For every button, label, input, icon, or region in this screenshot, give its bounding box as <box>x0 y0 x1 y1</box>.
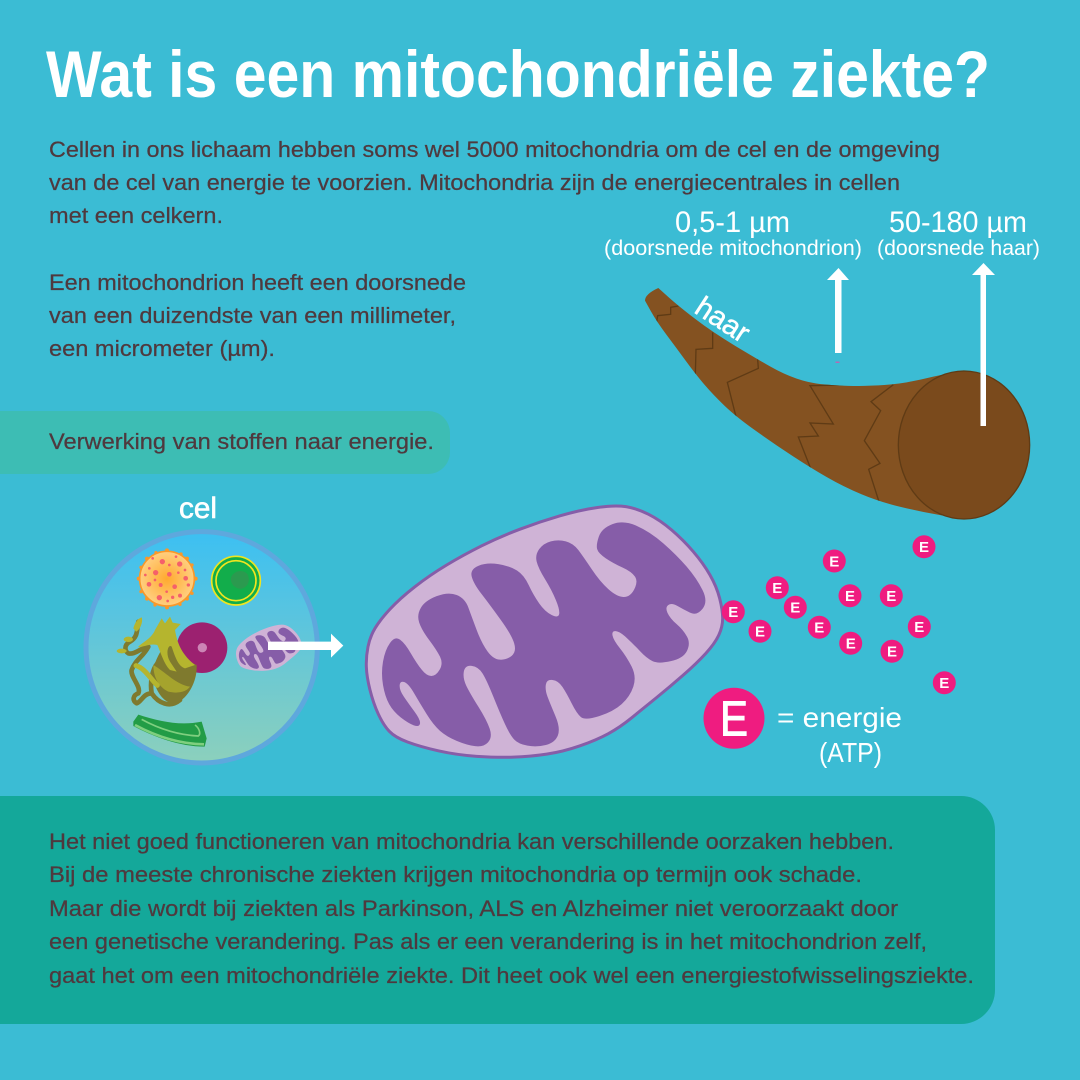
arrow: cell to mitochondrion <box>268 634 343 658</box>
label: cel: cel <box>179 492 217 525</box>
organelle: endoplasmic reticulum <box>133 715 207 747</box>
panel: causes <box>0 796 995 1024</box>
panel: causes: gaat het om een mitochondriële ziekte. Dit heet ook wel een energiestofwisselingsziekte. <box>49 963 974 988</box>
legend: energy: = energie <box>777 702 902 733</box>
label: mitochondrion size: 0,5-1 µm <box>675 206 790 239</box>
legend: energy: E <box>720 692 748 746</box>
energy particles: E <box>939 675 949 692</box>
arrow: hair size <box>972 263 995 426</box>
label: hair size: 50-180 µm <box>889 206 1027 239</box>
energy particles: E <box>829 553 839 570</box>
intro text: Cellen in ons lichaam hebben soms wel 5000 mitochondria om de cel en de omgeving <box>49 137 940 162</box>
label: mitochondrion size <box>604 206 862 260</box>
energy particles: E <box>790 600 800 617</box>
organelle: lysosome <box>137 548 198 609</box>
panel: causes: Bij de meeste chronische ziekten krijgen mitochondria op termijn ook schade. <box>49 862 862 887</box>
organelle: nucleus <box>177 622 227 673</box>
text: size of a mitochondrion: van een duizendste van een millimeter, <box>49 303 456 328</box>
organelle: golgi <box>117 617 197 704</box>
energy particles: E <box>919 539 929 556</box>
panel: causes: een genetische verandering. Pas als er een verandering is in het mitochondrion zelf, <box>49 929 927 954</box>
illustration: hair <box>645 288 1030 519</box>
legend: energy: (ATP) <box>819 737 882 768</box>
energy particles: E <box>728 604 738 621</box>
text: size of a mitochondrion <box>49 270 466 361</box>
energy particles: E <box>846 636 856 653</box>
text: size of a mitochondrion: Een mitochondrion heeft een doorsnede <box>49 270 466 295</box>
panel: processing callout <box>0 411 450 474</box>
energy particles: E <box>886 588 896 605</box>
panel: processing callout: Verwerking van stoffen naar energie. <box>49 429 434 454</box>
organelle: small mitochondrion <box>236 625 302 671</box>
legend: energy <box>704 688 902 768</box>
arrow: mitochondrion size <box>827 268 849 363</box>
intro text: met een celkern. <box>49 203 223 228</box>
energy particles <box>722 535 956 694</box>
energy particles: E <box>914 619 924 636</box>
title: Wat is een mitochondriële ziekte? <box>46 37 990 111</box>
organelle: green vesicle <box>212 556 260 605</box>
intro text <box>49 137 940 228</box>
label: hair size <box>877 206 1040 260</box>
intro text: van de cel van energie te voorzien. Mitochondria zijn de energiecentrales in cellen <box>49 170 900 195</box>
panel: causes: Het niet goed functioneren van mitochondria kan verschillende oorzaken hebben. <box>49 829 894 854</box>
label: hair size: (doorsnede haar) <box>877 237 1040 260</box>
label: mitochondrion size: (doorsnede mitochondrion) <box>604 237 862 260</box>
energy particles: E <box>755 624 765 641</box>
text: size of a mitochondrion: een micrometer (µm). <box>49 336 275 361</box>
energy particles: E <box>845 588 855 605</box>
energy particles: E <box>887 644 897 661</box>
panel: causes: Maar die wordt bij ziekten als Parkinson, ALS en Alzheimer niet veroorzaakt door <box>49 896 898 921</box>
label: haar: haar <box>689 291 756 350</box>
illustration: large mitochondrion <box>366 506 723 757</box>
energy particles: E <box>772 580 782 597</box>
illustration: cell <box>86 532 343 763</box>
energy particles: E <box>814 620 824 637</box>
